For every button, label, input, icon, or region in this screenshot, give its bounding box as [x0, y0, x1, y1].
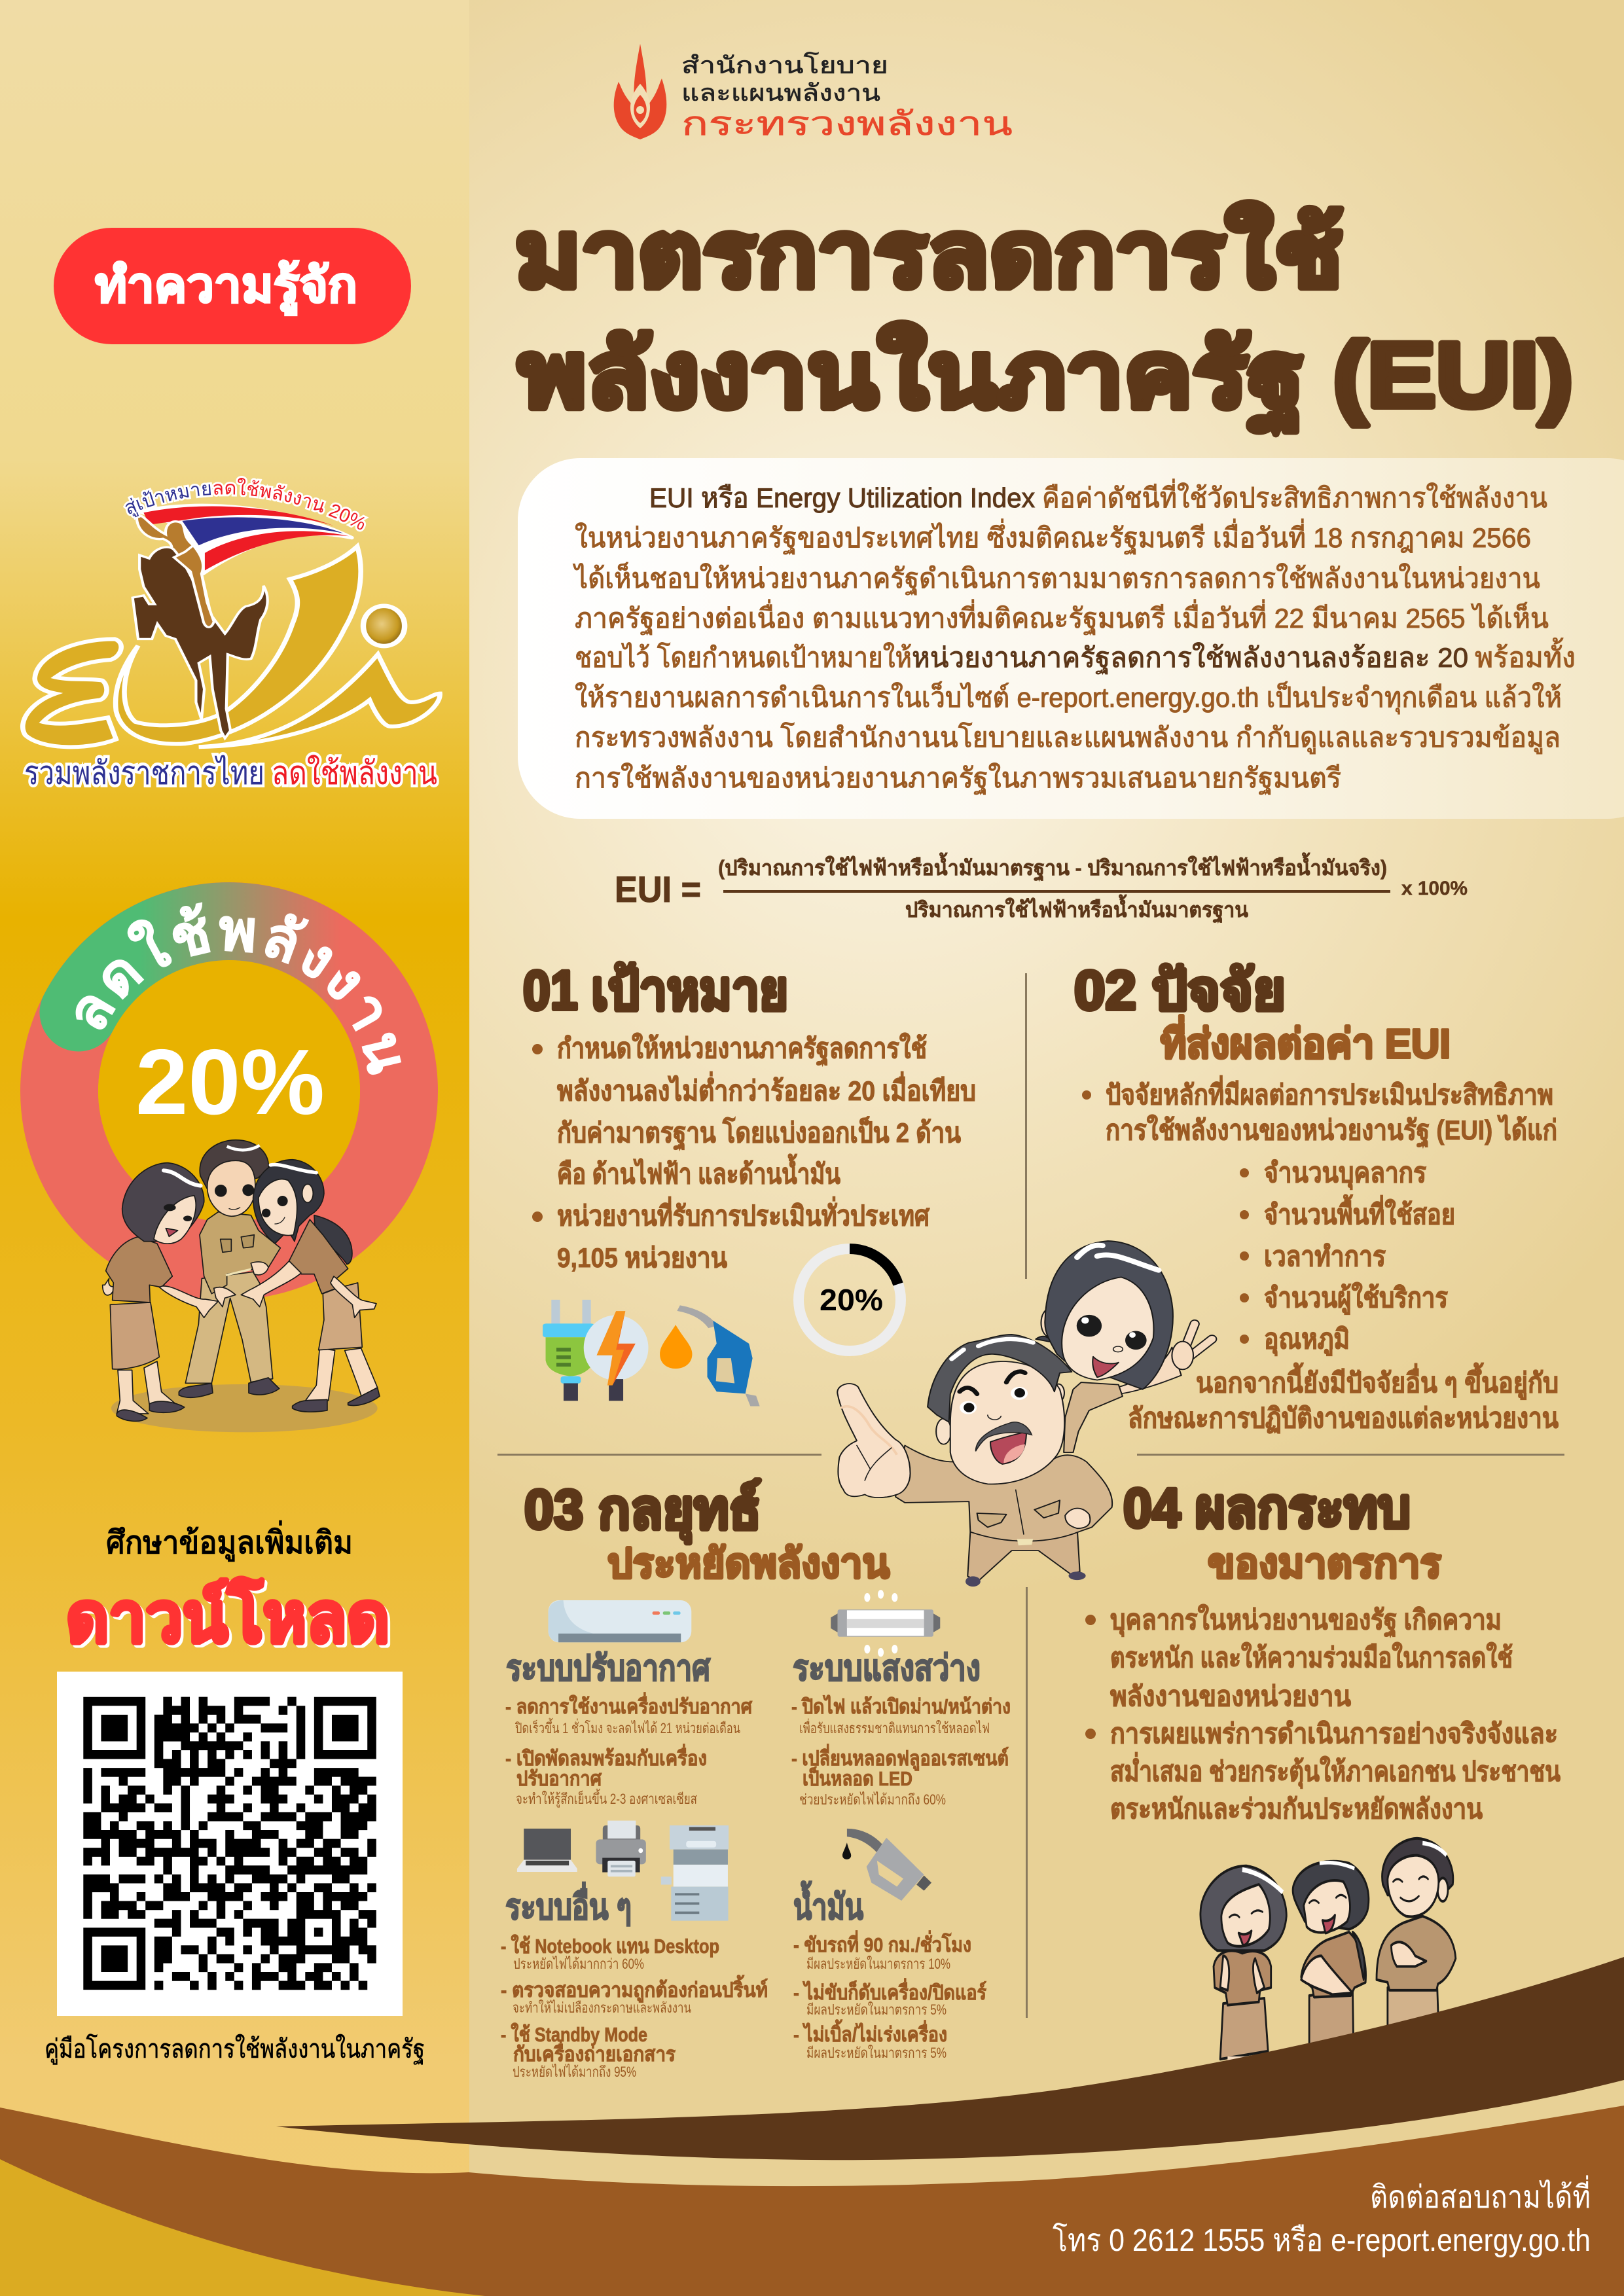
bullet list 01: กำหนดให้หน่วยงานภาครัฐลดการใช้	[557, 1032, 927, 1066]
left woman	[103, 1163, 218, 1421]
impact list: ตระหนัก และให้ความร่วมมือในการลดใช้	[1110, 1641, 1513, 1673]
block: other systems: - ใช้ Standby Mode	[501, 2022, 647, 2046]
download section	[45, 1520, 425, 2065]
heading 02: 02 ปัจจัย	[1074, 960, 1286, 1021]
bullet list 01: คือ ด้านไฟฟ้า และด้านน้ำมัน	[557, 1153, 840, 1189]
flag stripes	[139, 505, 352, 574]
man	[1377, 1839, 1456, 2043]
block: fuel: - ไม่ขับก็ดับเครื่อง/ปิดแอร์	[793, 1978, 986, 2004]
block: lighting: ช่วยประหยัดไฟได้มากถึง 60%	[799, 1791, 946, 1808]
logo tagline: ลดใช้พลังงาน	[272, 755, 437, 791]
panel: 03 strategy	[501, 1479, 1011, 2080]
logo tagline: สู่เป้าหมายลดใช้พลังงาน 20%	[123, 476, 369, 531]
subheading 04: ของมาตรการ	[1208, 1541, 1441, 1587]
title: มาตรการลดการใช้	[515, 202, 1343, 306]
block: air conditioning	[505, 1649, 753, 1808]
panel: intro: หน่วยงานภาครัฐลดการใช้พลังงานลงร้อยละ 20	[912, 642, 1468, 674]
block: other systems	[501, 1882, 768, 2080]
factor list: จำนวนบุคลากร	[1264, 1157, 1426, 1190]
block: lighting: - ปิดไฟ แล้วเปิดม่าน/หน้าต่าง	[791, 1695, 1011, 1718]
EUI campaign logo	[23, 505, 440, 747]
block: other systems: กับเครื่องถ่ายเอกสาร	[513, 2039, 676, 2066]
panel: intro: กระทรวงพลังงาน โดยสำนักงานนโยบายและแผนพลังงาน กำกับดูแลและรวบรวมข้อมูล	[575, 721, 1561, 754]
office name: สำนักงานโยบาย	[681, 52, 888, 79]
factor list: เวลาทำการ	[1264, 1241, 1386, 1272]
impact list: ตระหนักและร่วมกันประหยัดพลังงาน	[1110, 1793, 1483, 1824]
block: lighting: เป็นหลอด LED	[803, 1766, 912, 1790]
ground shadow	[111, 1384, 378, 1432]
block: other systems: จะทำให้ไม่เปลืองกระดาษและพลังงาน	[513, 2000, 691, 2016]
factor list: จำนวนพื้นที่ใช้สอย	[1264, 1194, 1455, 1230]
EUI formula: (ปริมาณการใช้ไฟฟ้าหรือน้ำมันมาตรฐาน - ปริมาณการใช้ไฟฟ้าหรือน้ำมันจริง)	[718, 852, 1387, 882]
block: other systems: - ใช้ Notebook แทน Desktop	[501, 1934, 719, 1958]
panel: intro: การใช้พลังงานของหน่วยงานภาครัฐในภาพรวมเสนอนายกรัฐมนตรี	[575, 762, 1341, 795]
bullet list 01: กับค่ามาตรฐาน โดยแบ่งออกเป็น 2 ด้าน	[557, 1116, 961, 1151]
block: other systems: - ตรวจสอบความถูกต้องก่อนปริ้นท์	[501, 1975, 768, 2003]
factor list: อุณหภูมิ	[1264, 1323, 1350, 1356]
panel: intro: ชอบไว้ โดยกำหนดเป้าหมายให้	[575, 641, 912, 673]
logo tagline: รวมพลังราชการไทย	[24, 755, 264, 791]
subheading 02: ที่ส่งผลต่อค่า EUI	[1161, 1015, 1451, 1067]
panel: intro: EUI หรือ Energy Utilization Index	[649, 482, 1035, 513]
chart: 20 percent ring	[799, 1249, 901, 1351]
background waves	[0, 2106, 1624, 2296]
chart: 20 percent ring: 20%	[820, 1283, 883, 1317]
divider lines	[497, 973, 1564, 2018]
factor list: จำนวนผู้ใช้บริการ	[1264, 1282, 1448, 1315]
contact footer	[1053, 2175, 1591, 2258]
block: fuel: มีผลประหยัดในมาตรการ 10%	[806, 1956, 950, 1972]
factor list: ปัจจัยหลักที่มีผลต่อการประเมินประสิทธิภาพ	[1106, 1075, 1553, 1110]
study more label: ศึกษาข้อมูลเพิ่มเติม	[106, 1520, 353, 1562]
red badge: ทำความรู้จัก	[95, 258, 357, 315]
factor list	[1082, 1075, 1559, 1433]
donut: reduce energy 20 percent: 20%	[135, 1030, 325, 1134]
EUI formula: EUI =	[615, 869, 701, 910]
QR caption: คู่มือโครงการลดการใช้พลังงานในภาครัฐ	[45, 2034, 425, 2065]
letter I	[199, 655, 440, 747]
red badge	[54, 228, 411, 344]
bullet list 01: 9,105 หน่วยงาน	[557, 1242, 727, 1273]
EUI formula: ปริมาณการใช้ไฟฟ้าหรือน้ำมันมาตรฐาน	[905, 894, 1248, 924]
block: fuel	[793, 1881, 986, 2061]
factor list: ลักษณะการปฏิบัติงานของแต่ละหน่วยงาน	[1128, 1403, 1559, 1433]
letter E	[23, 639, 121, 747]
icon: laptop, printer and copier	[517, 1821, 729, 1921]
block: fuel: น้ำมัน	[793, 1881, 863, 1927]
block: lighting: - เปลี่ยนหลอดฟลูออเรสเซนต์	[791, 1744, 1009, 1771]
block: fuel: มีผลประหยัดในมาตรการ 5%	[806, 2001, 947, 2018]
ministry name: กระทรวงพลังงาน	[681, 105, 1013, 142]
donut: reduce energy 20 percent	[27, 882, 438, 1287]
right woman	[241, 1160, 380, 1412]
EUI formula	[615, 852, 1468, 924]
panel: 01 target	[523, 960, 976, 1407]
ministry logo	[614, 44, 1013, 142]
horse and rider	[133, 515, 268, 738]
icon: flame	[614, 44, 666, 139]
block: air conditioning: - เปิดพัดลมพร้อมกับเครื่อง	[505, 1744, 707, 1770]
woman long hair	[1293, 1861, 1369, 2051]
donut: reduce energy 20 percent: ลดใช้พลังงาน	[76, 902, 402, 1075]
panel: 02 factors	[1074, 960, 1559, 1433]
impact list	[1085, 1604, 1561, 1824]
bullet list 01	[532, 1032, 976, 1273]
impact list: พลังงานของหน่วยงาน	[1110, 1681, 1351, 1712]
block: other systems: ประหยัดไฟได้มากถึง 95%	[513, 2064, 636, 2080]
bullet list 01: หน่วยงานที่รับการประเมินทั่วประเทศ	[557, 1196, 930, 1231]
impact list: บุคลากรในหน่วยงานของรัฐ เกิดความ	[1110, 1604, 1502, 1638]
title	[515, 202, 1573, 435]
woman short hair	[1200, 1866, 1286, 2080]
title: พลังงานในภาครัฐ (EUI)	[518, 323, 1573, 435]
panel: intro: คือค่าดัชนีที่ใช้วัดประสิทธิภาพการใช้พลังงาน	[1042, 479, 1547, 513]
block: other systems: ระบบอื่น ๆ	[505, 1882, 632, 1927]
panel: intro	[518, 458, 1624, 819]
subheading 03: ประหยัดพลังงาน	[607, 1541, 890, 1587]
download heading: ดาวน์โหลด	[69, 1580, 392, 1659]
block: lighting	[791, 1649, 1011, 1808]
man pointing	[837, 1335, 1112, 1587]
panel: intro: พร้อมทั้ง	[1475, 637, 1576, 673]
illustration: officer man and woman	[837, 1241, 1212, 1587]
illustration: three happy officers	[1200, 1839, 1456, 2080]
block: air conditioning: ปรับอากาศ	[516, 1767, 602, 1790]
panel: intro: ได้เห็นชอบให้หน่วยงานภาครัฐดำเนินการตามมาตรการลดการใช้พลังงานในหน่วยงาน	[573, 562, 1540, 595]
panel: intro: ภาครัฐอย่างต่อเนื่อง ตามแนวทางที่มติคณะรัฐมนตรี เมื่อวันที่ 22 มีนาคม 2565 ได้เห็น	[575, 600, 1549, 635]
heading 04: 04 ผลกระทบ	[1123, 1477, 1411, 1539]
impact list: การเผยแพร่การดำเนินการอย่างจริงจังและ	[1110, 1718, 1558, 1749]
woman behind	[1036, 1241, 1212, 1452]
panel: intro: ในหน่วยงานภาครัฐของประเทศไทย ซึ่งมติคณะรัฐมนตรี เมื่อวันที่ 18 กรกฎาคม 2566	[575, 519, 1531, 554]
centre officer	[179, 1140, 280, 1397]
heading 01: 01 เป้าหมาย	[523, 960, 788, 1021]
block: air conditioning: ระบบปรับอากาศ	[506, 1649, 711, 1688]
bullet list 01: พลังงานลงไม่ต่ำกว่าร้อยละ 20 เมื่อเทียบ	[557, 1071, 976, 1106]
icon: gray fuel nozzle	[842, 1829, 931, 1901]
block: air conditioning: จะทำให้รู้สึกเย็นขึ้น 2-3 องศาเซลเซียส	[516, 1789, 697, 1808]
block: lighting: เพื่อรับแสงธรรมชาติแทนการใช้หลอดไฟ	[799, 1718, 990, 1736]
heading 03: 03 กลยุทธ์	[524, 1479, 761, 1544]
icon: fluorescent tube	[831, 1590, 940, 1657]
block: fuel: - ไม่เบิ้ล/ไม่เร่งเครื่อง	[793, 2019, 947, 2046]
EUI formula: x 100%	[1401, 878, 1468, 899]
QR code	[57, 1672, 403, 2016]
download heading: ดาวน์โหลด	[66, 1577, 389, 1657]
contact footer: ติดต่อสอบถามได้ที่	[1370, 2175, 1591, 2215]
letter U and V swoosh	[116, 547, 361, 744]
block: other systems: ประหยัดไฟได้มากกว่า 60%	[513, 1956, 644, 1972]
dark wave	[276, 1957, 1624, 2160]
block: air conditioning: - ลดการใช้งานเครื่องปรับอากาศ	[505, 1692, 753, 1718]
block: fuel: - ขับรถที่ 90 กม./ชั่วโมง	[793, 1930, 971, 1956]
icon: air conditioner	[549, 1600, 691, 1642]
panel: 04 impact	[1085, 1477, 1561, 1824]
ministry logo: และแผนพลังงาน	[681, 79, 880, 106]
factor list: การใช้พลังงานของหน่วยงานรัฐ (EUI) ได้แก่	[1106, 1114, 1557, 1148]
illustration: three officers huddled	[103, 1140, 380, 1432]
factor list: นอกจากนี้ยังมีปัจจัยอื่น ๆ ขึ้นอยู่กับ	[1196, 1362, 1559, 1400]
block: fuel: มีผลประหยัดในมาตรการ 5%	[806, 2045, 947, 2061]
logo tagline	[22, 476, 439, 791]
icon: plug, bolt, drop and fuel nozzle	[543, 1300, 760, 1407]
panel: intro: ให้รายงานผลการดำเนินการในเว็บไซต์ e-report.energy.go.th เป็นประจำทุกเดือน แล้วให้	[575, 681, 1562, 715]
block: lighting: ระบบแสงสว่าง	[793, 1649, 981, 1688]
block: air conditioning: ปิดเร็วขึ้น 1 ชั่วโมง จะลดไฟได้ 21 หน่วยต่อเดือน	[514, 1718, 740, 1736]
